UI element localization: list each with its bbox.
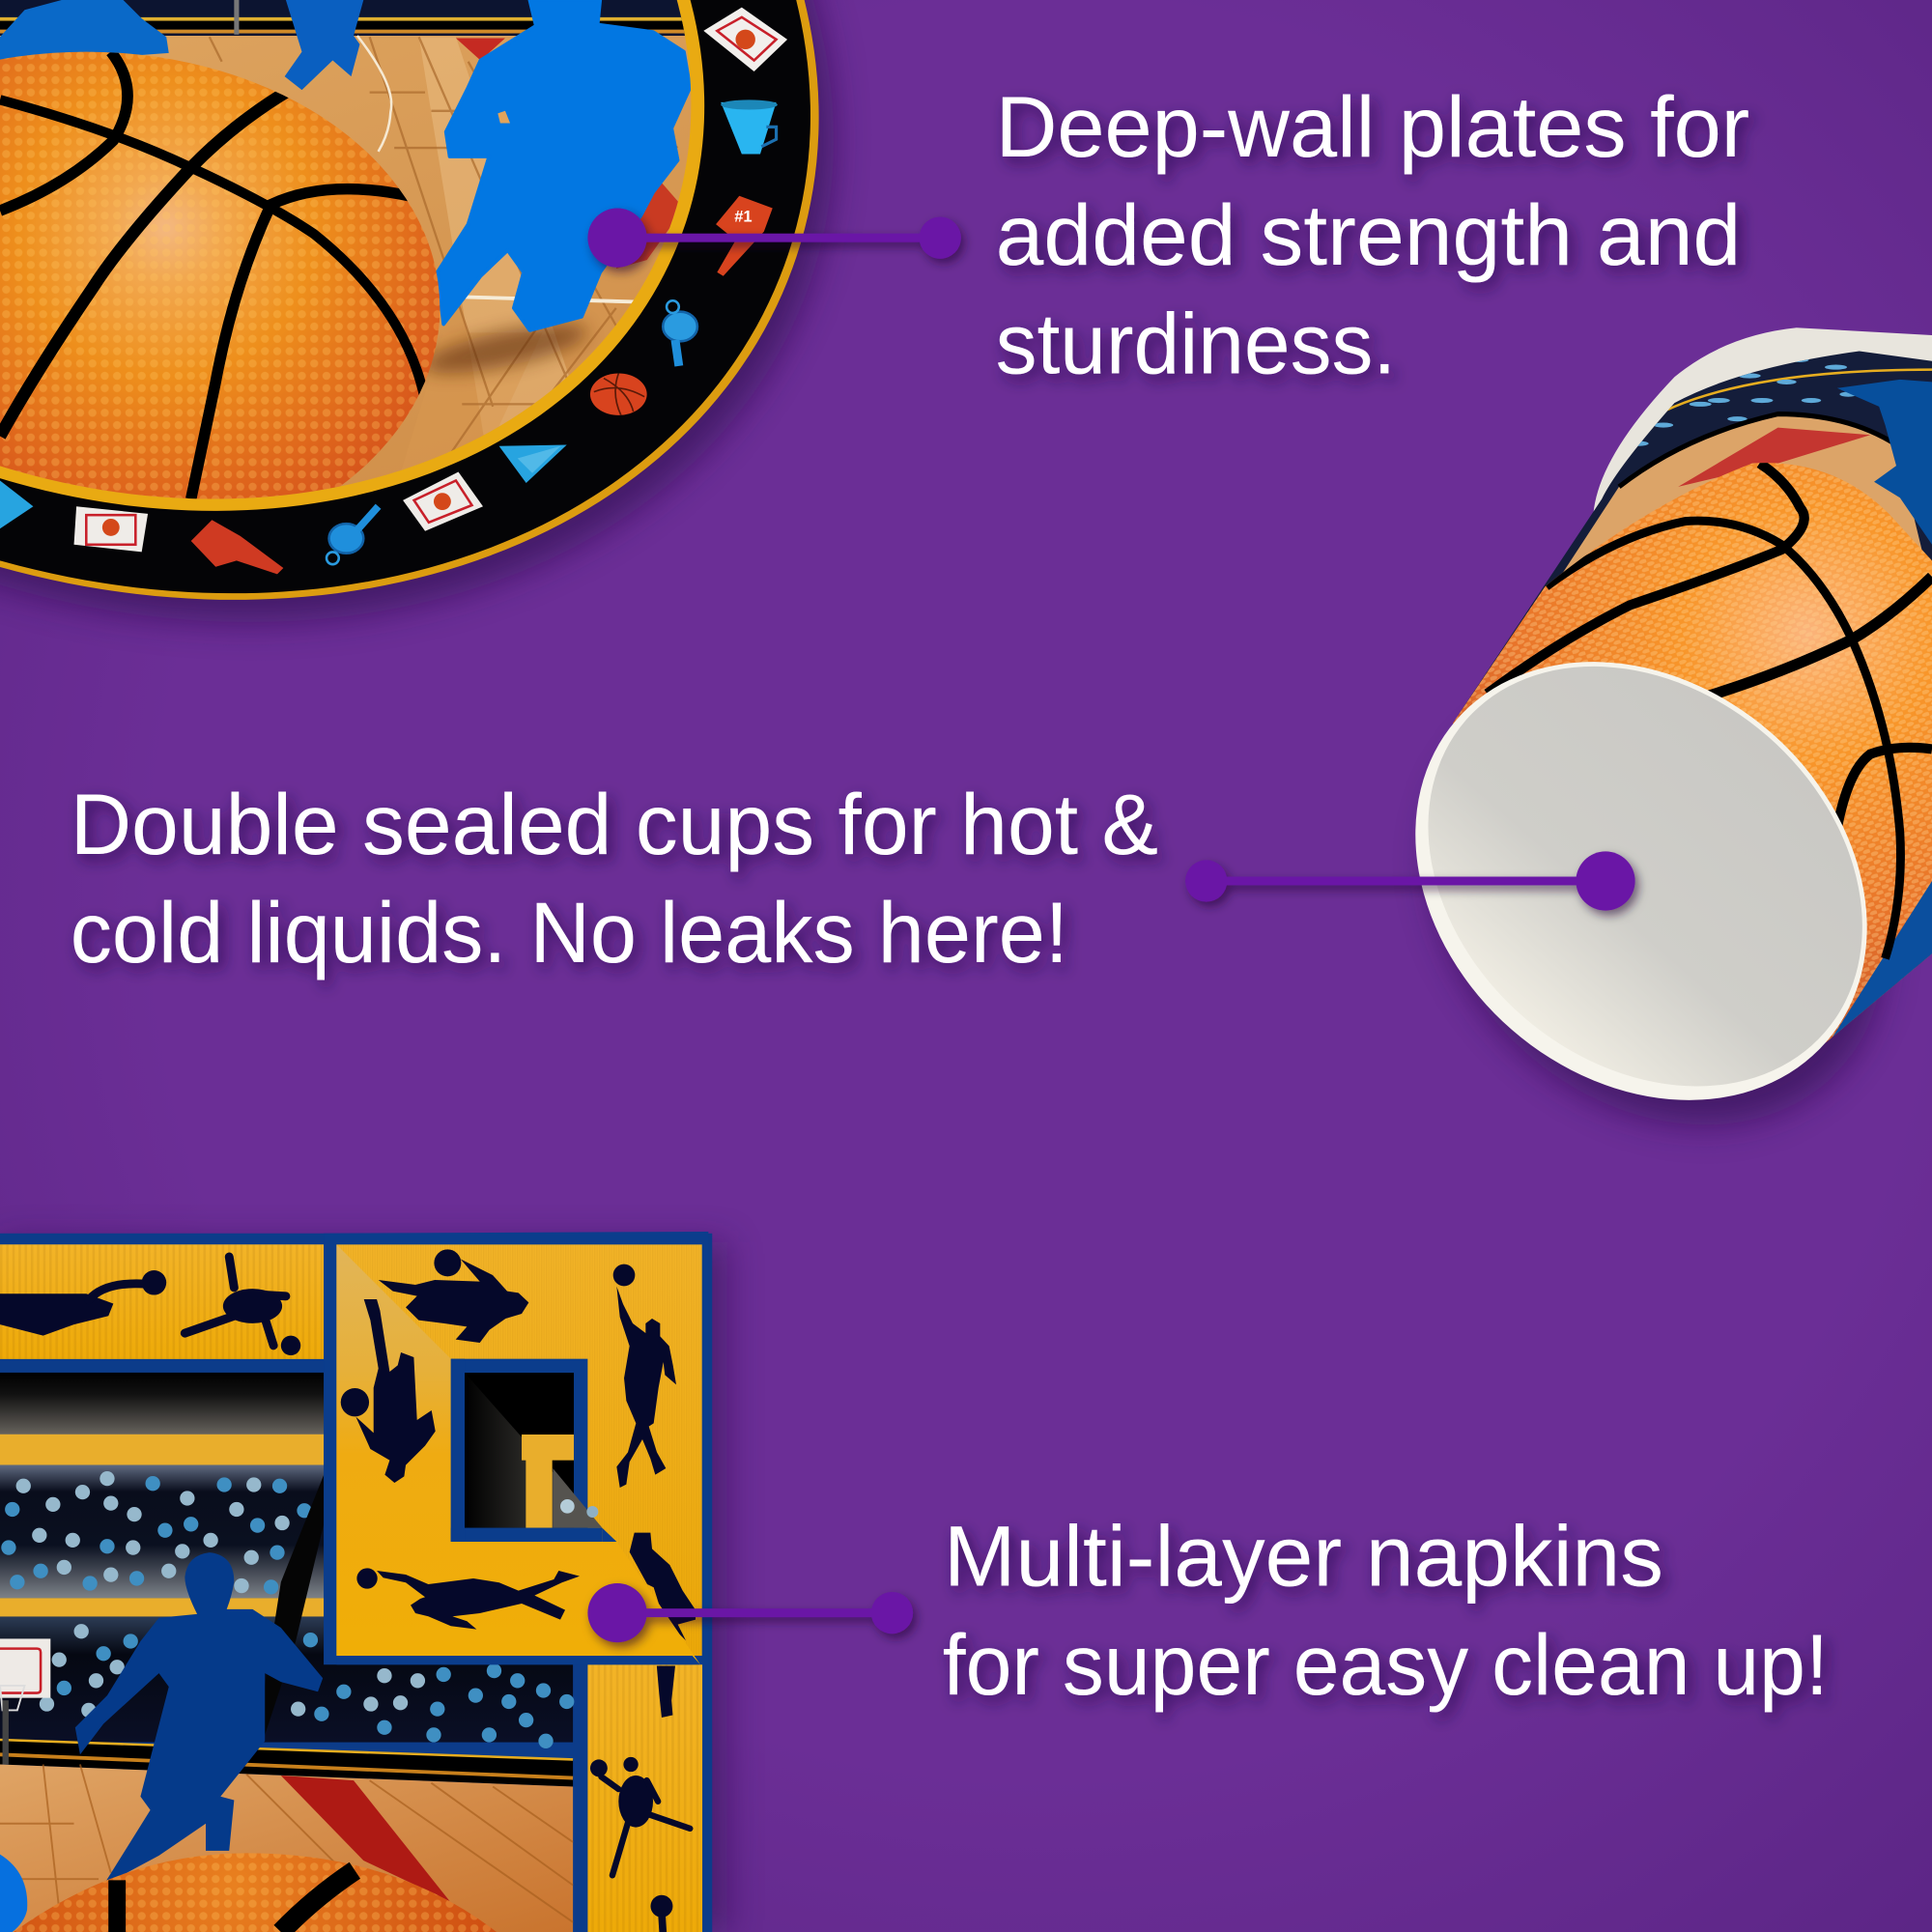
heading: plates feature text [996,78,1749,391]
silhouette strip top [630,1533,696,1640]
blue ball edge [0,1855,27,1932]
icon: diamond backboard [703,8,787,71]
icon: foam finger [716,196,773,276]
silhouette strip below fold [657,1665,675,1718]
icon: small basketball [590,373,647,415]
panel border [324,1232,708,1664]
crowd dots [16,1471,425,1718]
napkin band and strip silhouettes [0,1257,690,1932]
plate court scene [0,0,787,574]
icon: megaphone three [0,480,33,528]
heading: napkins feature text: Multi-layer napkins [944,1508,1663,1605]
blue player silhouette [75,1552,323,1886]
cup base [1327,571,1932,1191]
fold shadow wedge [263,1465,330,1735]
middle player silhouette [285,0,363,90]
heading: cups feature text [71,776,1158,980]
icon: whistle two [327,506,379,564]
heading: napkins feature text: for super easy clean up! [943,1616,1829,1713]
cup player silhouette [1837,380,1932,545]
silhouette panel bottom [356,1568,580,1630]
cup body scene [1441,321,1932,1060]
icon: backboard [403,472,483,531]
lower basketball [14,1853,497,1932]
icon: whistle [663,300,697,366]
connector: plate [587,209,961,268]
top gold band [0,1244,327,1359]
heading: plates feature text: sturdiness. [996,295,1396,391]
plate [0,0,848,638]
icon: cone cup [721,99,778,154]
heading: napkins feature text [943,1508,1829,1713]
plate rim icons [0,8,787,574]
right gold strip [587,1658,702,1932]
silhouette flap [341,1299,436,1483]
heading: cups feature text: cold liquids. No leaks here! [71,884,1068,980]
panel gold field [336,1244,702,1656]
silhouette top band right [185,1257,300,1355]
plate rim [0,0,982,789]
large player silhouette [438,0,690,330]
heading: plates feature text: added strength and [996,186,1741,283]
court red stripe [281,1776,450,1901]
heading: plates feature text: Deep-wall plates for [996,78,1749,175]
silhouette strip middle [590,1757,690,1875]
folded flap [336,1244,700,1664]
heading: cups feature text: Double sealed cups for hot & [71,776,1158,872]
icon: foam finger two [191,520,283,574]
connector: napkin [587,1583,913,1642]
silhouette panel right [613,1264,676,1488]
plate shadow [0,0,997,811]
plate basketball [0,52,440,498]
icon: backboard three [74,506,148,552]
cup [1327,321,1932,1215]
napkin printed scene [0,1373,574,1932]
silhouette top band left [0,1270,166,1336]
connector: cup [1185,851,1635,911]
napkin folded panel [324,1232,708,1664]
cup shadow [1343,596,1932,1215]
napkin base [0,1234,712,1932]
silhouette panel top [379,1249,528,1343]
icon: foam finger: #1 [734,208,753,226]
napkin shadow [0,1242,727,1932]
panel window [451,1359,602,1542]
cup rim [1593,327,1932,518]
napkin [0,1232,727,1932]
icon: megaphone [499,444,567,483]
cup basketball [1441,443,1932,1060]
silhouette strip bottom [650,1895,672,1932]
backboard [0,1638,50,1765]
left player silhouette [0,0,169,60]
